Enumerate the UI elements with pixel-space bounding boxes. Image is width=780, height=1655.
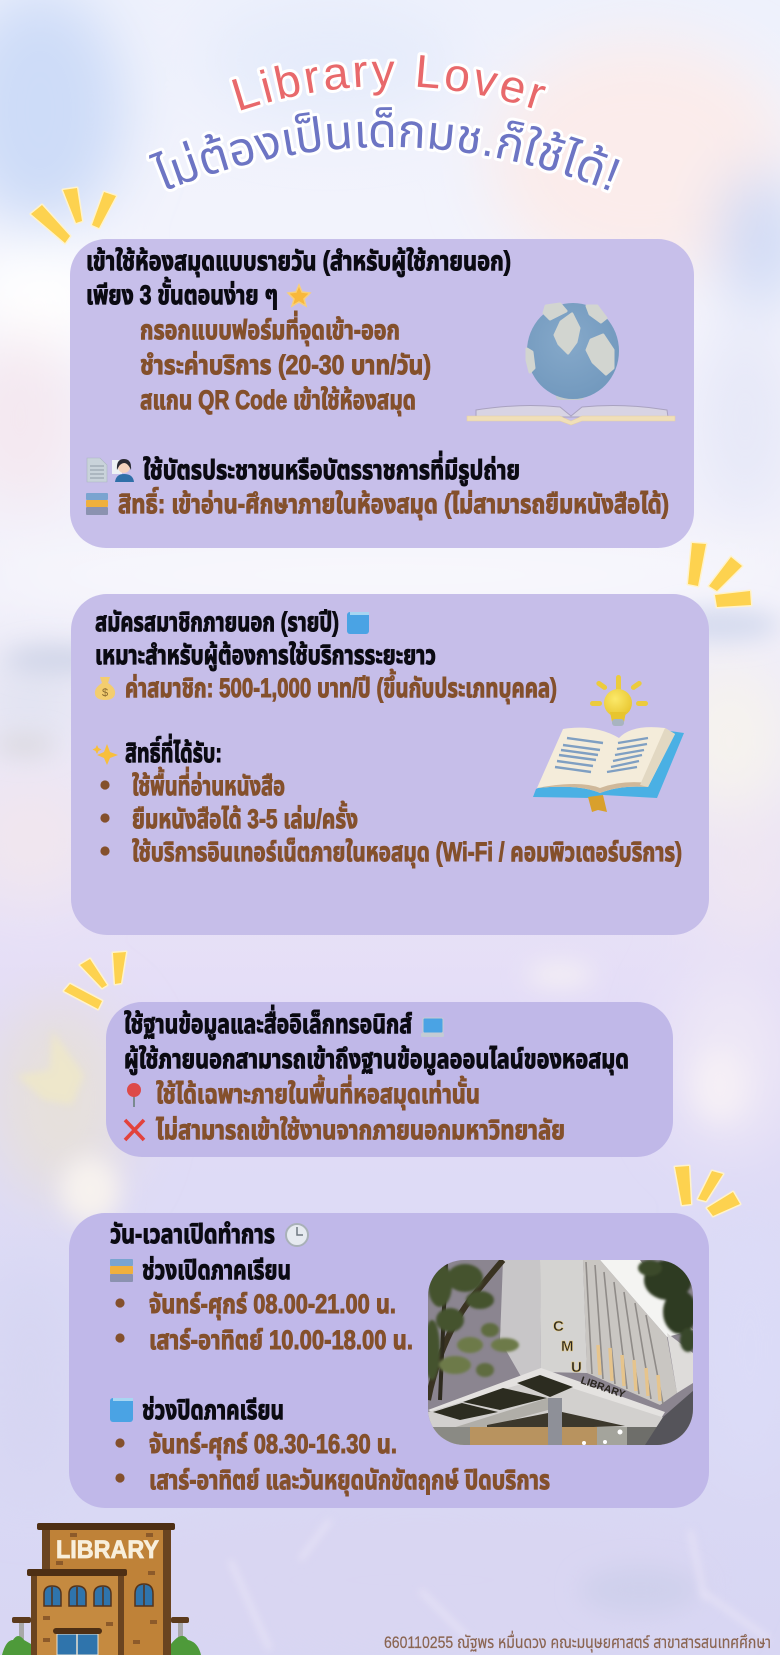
icon: red cross — [125, 1120, 144, 1140]
rights list: ใช้พื้นที่อ่านหนังสือ — [132, 767, 285, 801]
step 2: ชำระค่าบริการ (20-30 บาท/วัน) — [140, 350, 431, 380]
icon: blue book — [110, 1398, 133, 1422]
panel: annual membership — [71, 594, 709, 935]
icon: stack of books — [86, 493, 108, 515]
heading: daily access: เข้าใช้ห้องสมุดแบบรายวัน (สำหรับผู้ใช้ภายนอก) — [86, 246, 511, 277]
panel: electronic databases — [106, 1002, 673, 1157]
icon: money bag — [95, 677, 115, 700]
title line 1: Library Lover — [229, 52, 549, 114]
icon: blue book — [347, 612, 369, 634]
subheading: three steps: เพียง 3 ขั้นตอนง่าย ๆ — [86, 277, 278, 310]
illustration: brick library building — [2, 1523, 201, 1655]
sign: LIBRARY lettering: LIBRARY — [579, 1374, 627, 1401]
icon: clock — [286, 1224, 308, 1246]
rights: สิทธิ์: เข้าอ่าน-ศึกษาภายในห้องสมุด (ไม่สามารถยืมหนังสือได้) — [118, 487, 669, 520]
icon: money bag: $ — [102, 687, 108, 699]
rights list: ยืมหนังสือได้ 3-5 เล่ม/ครั้ง — [132, 801, 358, 834]
icon: sparkles — [92, 744, 118, 765]
title line 2: ไม่ต้องเป็นเด็กมช.ก็ใช้ได้! — [146, 104, 622, 194]
icon: glowing star — [288, 285, 310, 306]
ID requirement: ใช้บัตรประชาชนหรือบัตรราชการที่มีรูปถ่าย — [143, 451, 520, 486]
icon: laptop — [421, 1018, 444, 1037]
heading: hours: วัน-เวลาเปิดทำการ — [110, 1219, 275, 1249]
off-campus restriction: ไม่สามารถเข้าใช้งานจากภายนอกมหาวิทยาลัย — [156, 1115, 565, 1145]
break heading: ช่วงปิดภาคเรียน — [142, 1395, 284, 1425]
sunburst accent: hours panel — [675, 1166, 740, 1216]
step 1: กรอกแบบฟอร์มที่จุดเข้า-ออก — [140, 311, 400, 346]
break hours: เสาร์-อาทิตย์ และวันหยุดนักขัตฤกษ์ ปิดบริการ — [149, 1465, 550, 1496]
sunburst accent: top left — [31, 188, 116, 243]
term time hours: เสาร์-อาทิตย์ 10.00-18.00 น. — [149, 1325, 413, 1355]
panel: daily access — [70, 239, 694, 548]
on-site only: ใช้ได้เฉพาะภายในพื้นที่หอสมุดเท่านั้น — [156, 1075, 480, 1110]
step 3: สแกน QR Code เข้าใช้ห้องสมุด — [140, 385, 416, 416]
rights heading: สิทธิ์ที่ได้รับ: — [125, 734, 222, 768]
panel: opening hours — [69, 1213, 709, 1508]
heading: databases: ใช้ฐานข้อมูลและสื่ออิเล็กทรอนิกส์ — [124, 1005, 412, 1040]
heading: annual membership: สมัครสมาชิกภายนอก (รายปี) — [95, 607, 339, 637]
illustration: lightbulb over open book — [533, 675, 684, 812]
term time heading: ช่วงเปิดภาคเรียน — [142, 1255, 291, 1285]
icon: red pin — [127, 1083, 141, 1107]
membership fee: ค่าสมาชิก: 500-1,000 บาท/ปี (ขึ้นกับประเภทบุคคล) — [125, 669, 557, 704]
break hours — [115, 1429, 550, 1496]
break hours: จันทร์-ศุกร์ 08.30-16.30 น. — [149, 1429, 397, 1460]
sign text: LIBRARY — [56, 1536, 159, 1564]
subheading: ผู้ใช้ภายนอกสามารถเข้าถึงฐานข้อมูลออนไลน์ของหอสมุด — [124, 1044, 629, 1075]
term time hours — [115, 1289, 413, 1355]
icon: stack of books — [110, 1259, 133, 1282]
title — [146, 52, 622, 194]
icon: document and person — [87, 458, 134, 482]
subheading: เหมาะสำหรับผู้ต้องการใช้บริการระยะยาว — [95, 640, 436, 671]
sunburst accent: database panel — [64, 952, 126, 1009]
illustration: globe floating over open book — [467, 303, 675, 425]
photo: CMU library building — [424, 1260, 697, 1445]
sunburst accent: top right of membership — [688, 543, 751, 607]
rights list — [100, 767, 682, 868]
term time hours: จันทร์-ศุกร์ 08.00-21.00 น. — [149, 1289, 396, 1320]
sign: CMU lettering: CMU — [553, 1318, 582, 1376]
